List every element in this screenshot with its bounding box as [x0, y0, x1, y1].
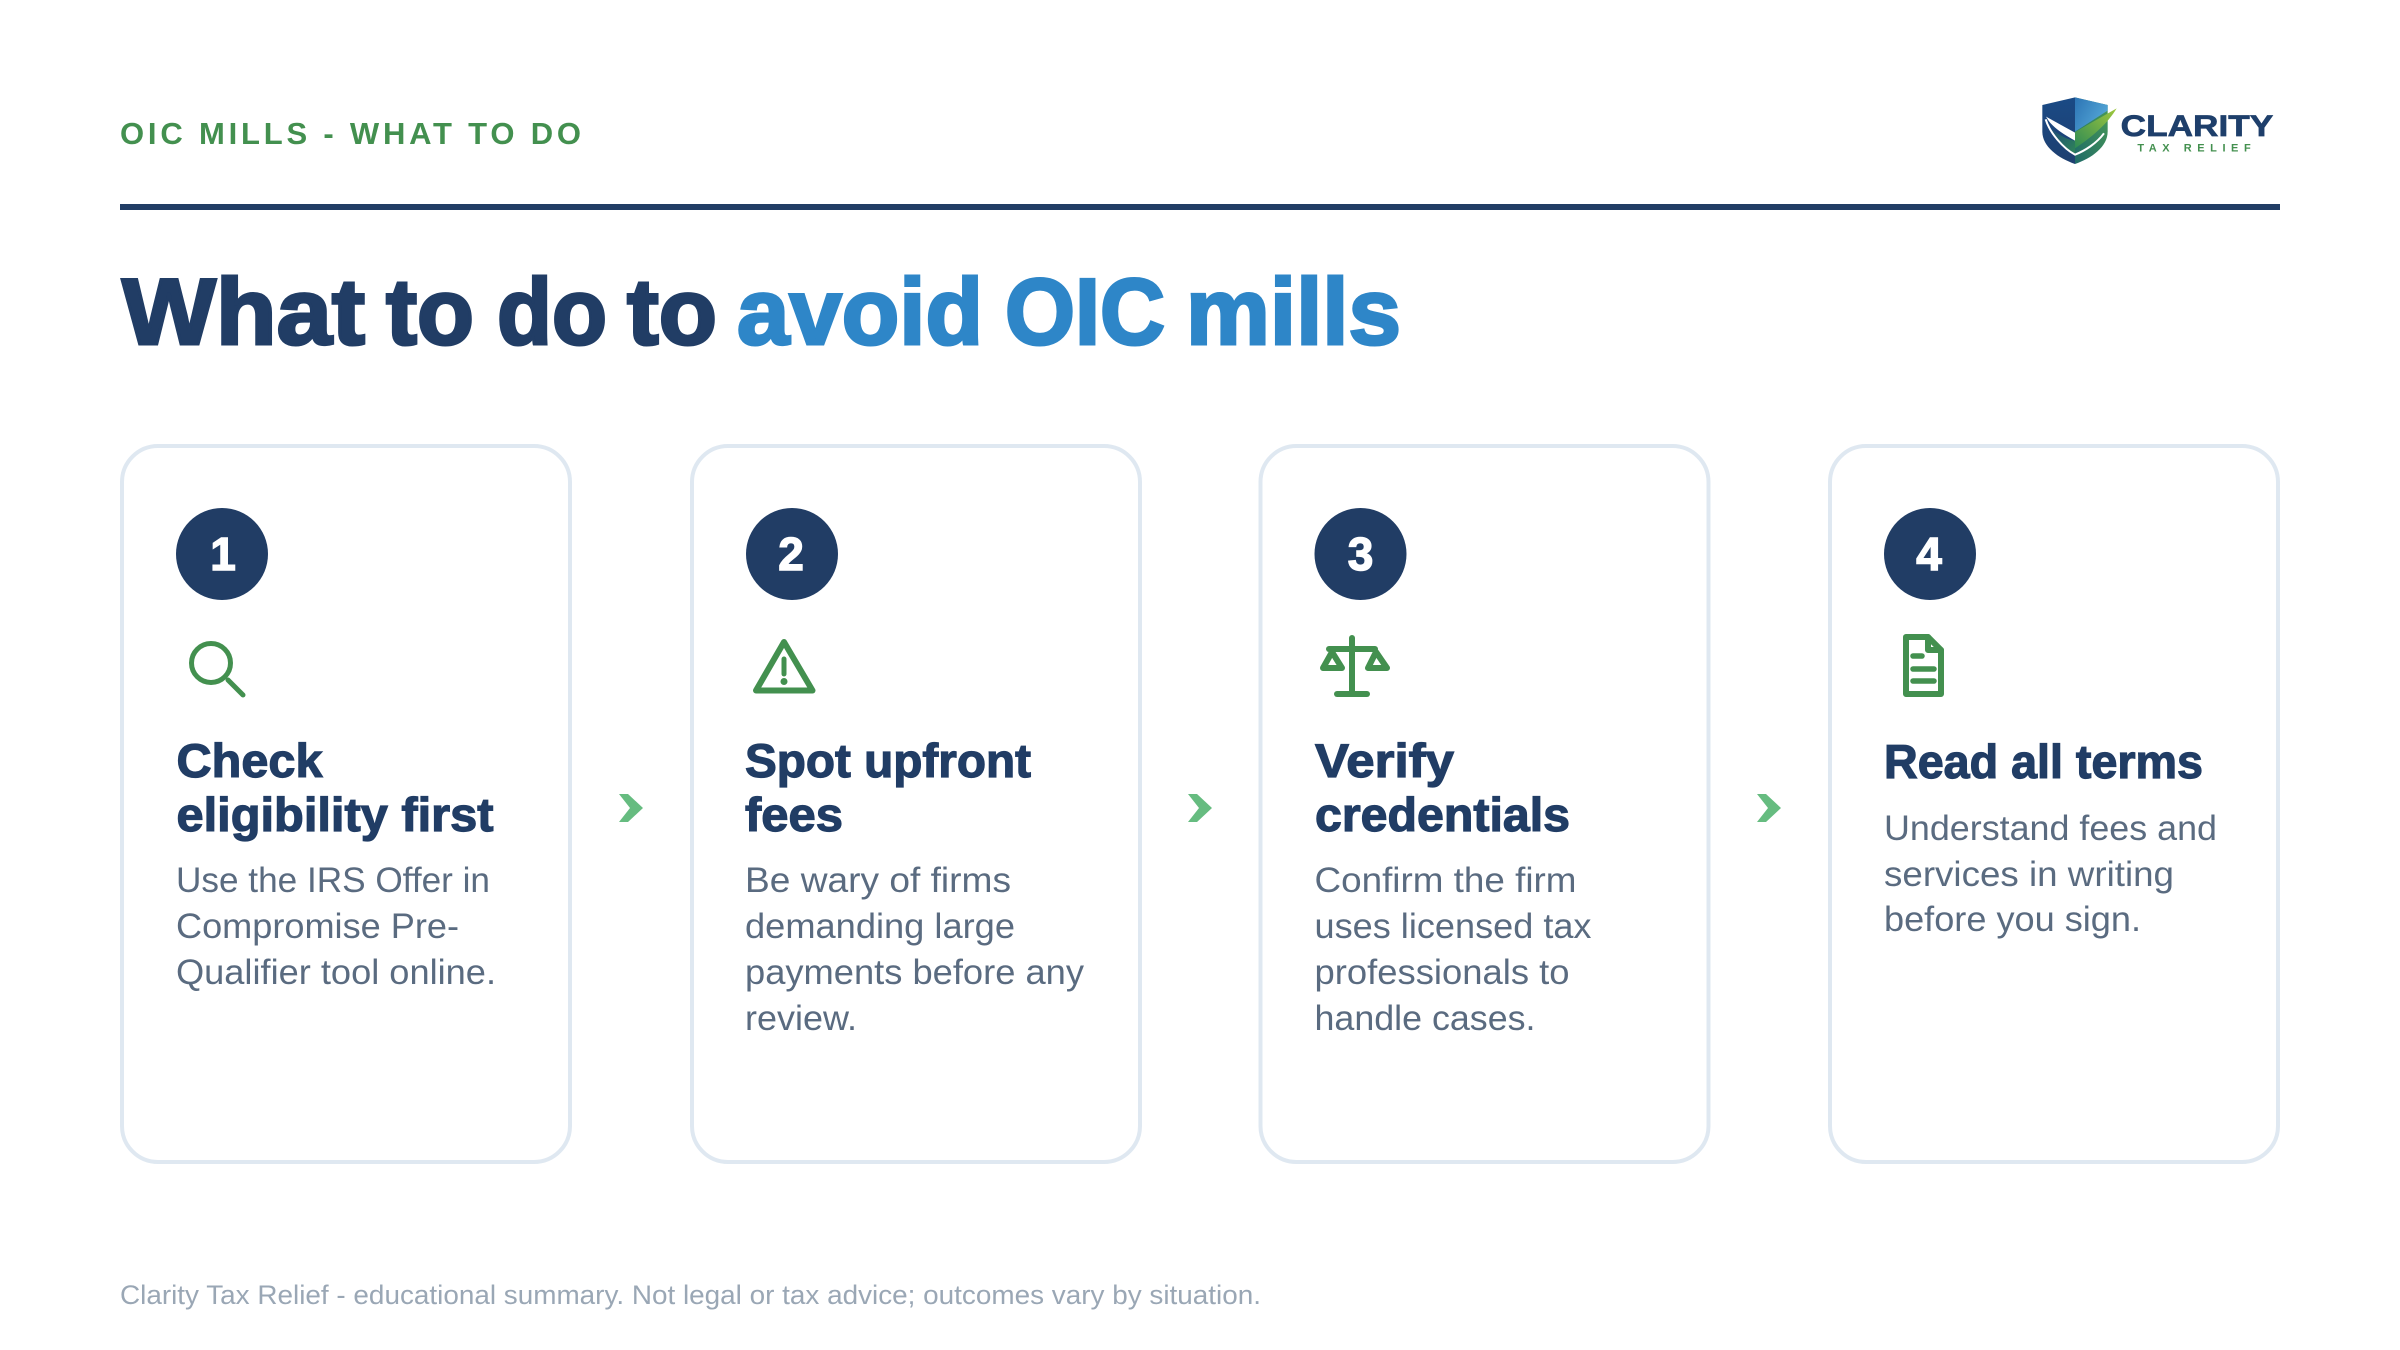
step number 1: 1 [210, 528, 236, 580]
step number 4: 4 [1916, 528, 1942, 580]
heading: Spot upfront [745, 734, 1031, 787]
step number 4 [1884, 508, 1976, 600]
heading [1315, 734, 1570, 841]
step number 2 [746, 508, 838, 600]
logo wordmark: TAX RELIEF [2137, 143, 2251, 155]
title: to [386, 259, 474, 364]
step number 3 [1314, 508, 1406, 600]
panel: step 2 [692, 446, 1140, 1162]
heading: Read all terms [1884, 735, 2203, 788]
card outline [692, 446, 1140, 1162]
arrow 1 [619, 794, 643, 822]
body text: Use the IRS Offer in [176, 860, 490, 900]
heading [745, 734, 1031, 841]
body text: professionals to [1314, 952, 1570, 992]
title: avoid [737, 259, 983, 364]
heading: credentials [1315, 788, 1570, 841]
step number 3: 3 [1348, 528, 1373, 580]
title: do [497, 259, 607, 364]
body text [176, 860, 496, 992]
body text [745, 860, 1084, 1038]
body text: handle cases. [1314, 998, 1536, 1038]
icon: warning triangle [756, 642, 812, 690]
body text: Understand fees and [1884, 808, 2217, 848]
logo wordmark: CLARITY [2121, 110, 2273, 143]
card outline [122, 446, 570, 1162]
body text [1314, 860, 1592, 1038]
arrow 3 [1757, 794, 1781, 822]
heading [176, 734, 494, 841]
title: What [122, 259, 365, 364]
body text: payments before any [745, 952, 1084, 992]
body text: Be wary of firms [745, 860, 1011, 900]
title: OIC [1005, 259, 1165, 364]
card outline [1260, 446, 1708, 1162]
icon: magnifying glass [192, 644, 243, 695]
footer disclaimer: Clarity Tax Relief - educational summary. Not legal or tax advice; outcomes vary by situation. [120, 1280, 1261, 1310]
arrow 2 [1188, 794, 1212, 822]
body text: Qualifier tool online. [176, 952, 496, 992]
body text: services in writing [1884, 854, 2174, 894]
step number 1 [176, 508, 268, 600]
panel: step 4 [1830, 446, 2278, 1162]
body text: uses licensed tax [1314, 906, 1592, 946]
logo: Clarity Tax Relief [2042, 97, 2273, 164]
logo shield [2042, 97, 2117, 164]
eyebrow label: OIC MILLS - WHAT TO DO [120, 116, 581, 151]
body text: before you sign. [1884, 899, 2141, 939]
body text: Confirm the firm [1314, 860, 1576, 900]
card outline [1830, 446, 2278, 1162]
body text [1884, 808, 2217, 939]
body text: demanding large [745, 906, 1015, 946]
icon: document [1906, 637, 1941, 694]
title: to [627, 259, 717, 364]
title: mills [1186, 259, 1401, 364]
panel: step 3 [1260, 446, 1708, 1162]
heading: Check [176, 734, 323, 787]
heading: eligibility first [176, 788, 494, 841]
step number 2: 2 [778, 528, 804, 580]
logo wordmark [2121, 110, 2273, 155]
heading: fees [745, 788, 843, 841]
body text: review. [745, 998, 857, 1038]
title [122, 259, 1401, 364]
header rule [120, 204, 2280, 210]
heading: Verify [1315, 734, 1454, 787]
icon: balance scales [1323, 638, 1387, 694]
body text: Compromise Pre- [176, 906, 459, 946]
panel: step 1 [122, 446, 570, 1162]
